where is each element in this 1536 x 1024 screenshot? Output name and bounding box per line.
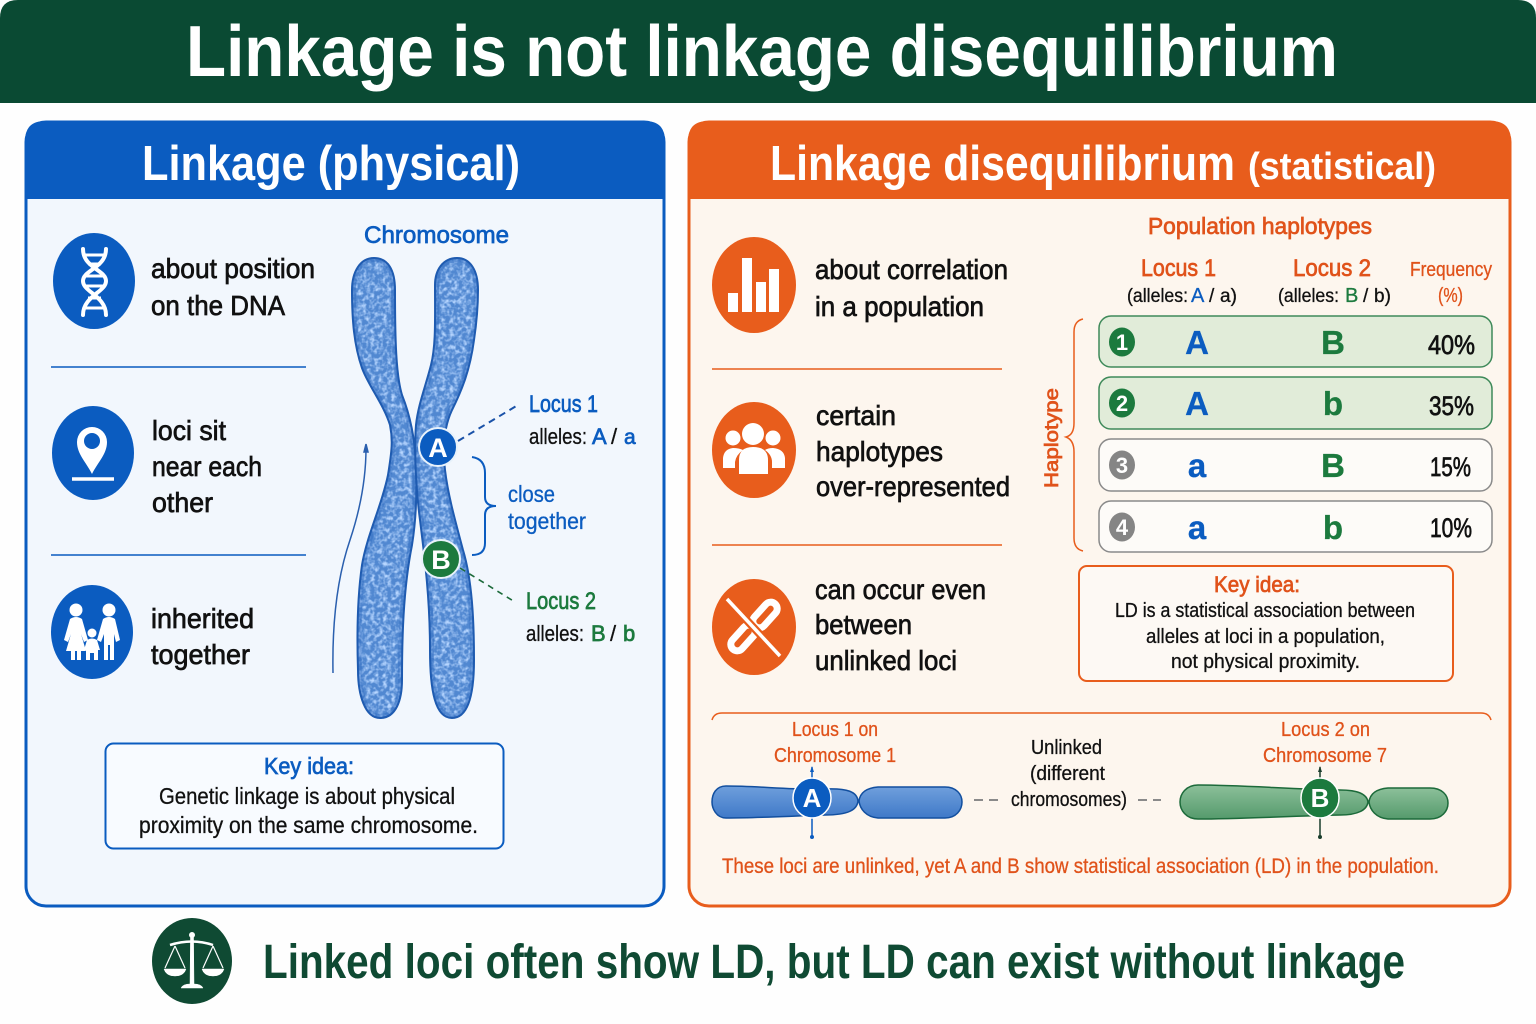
brace: close together: close (508, 481, 555, 507)
table row 2: 2 (1116, 391, 1128, 416)
table row 1 (1099, 316, 1492, 367)
table row 2: 35% (1429, 391, 1474, 421)
table row 1: 40% (1428, 330, 1475, 360)
table row 4: 4 (1116, 515, 1129, 540)
table row 4: b (1323, 509, 1343, 546)
panel header: linkage disequilibrium: (statistical) (1248, 146, 1436, 188)
table row 1: 1 (1116, 330, 1128, 355)
table header: locus 1: a) (1220, 286, 1237, 307)
table header: frequency (1410, 259, 1492, 307)
text: about position: about position (151, 253, 315, 284)
heading: population haplotypes: Population haplotypes (1148, 213, 1372, 239)
callout: key idea LD (1079, 566, 1453, 681)
label: locus 1: Locus 1 (529, 391, 598, 418)
table row 2 (1099, 377, 1492, 429)
icon: bar chart (712, 237, 796, 333)
table row 1: B (1321, 324, 1345, 361)
callout: key idea linkage: Genetic linkage is about physical (159, 783, 455, 809)
table header: locus 2: Locus 2 (1293, 255, 1371, 282)
icon: broken chain link (712, 579, 796, 675)
table header: locus 1: / (1209, 286, 1215, 307)
marker: locus A: A (428, 433, 448, 463)
text: loci sit near each other: loci sit (152, 415, 226, 446)
heading: chromosome: Chromosome (364, 222, 509, 249)
table row 2: b (1323, 385, 1343, 422)
table header: frequency: (%) (1438, 285, 1463, 307)
text: can occur even between unlinked loci: can occur even (815, 574, 986, 605)
callout: key idea LD: not physical proximity. (1171, 651, 1360, 673)
label: locus 1 on chromosome 1 (774, 719, 896, 767)
label: locus 1 on chromosome 1: Locus 1 on (792, 719, 878, 741)
icon: balance scale (152, 918, 232, 1004)
marker: locus B: B (431, 545, 451, 575)
label: locus 2 on chromosome 7: Chromosome 7 (1263, 745, 1387, 767)
text: certain haplotypes over-represented (816, 400, 1010, 502)
blue chromosome with locus A (712, 766, 962, 839)
label: unlinked: Unlinked (1031, 737, 1102, 759)
panel: linkage (physical) (25, 121, 665, 906)
arrow: curved along chromosome (333, 444, 368, 673)
table row 3 (1099, 439, 1492, 491)
label: locus 2 on chromosome 7 (1263, 719, 1387, 767)
panel header: linkage disequilibrium (688, 121, 1511, 199)
label: locus 2 on chromosome 7: Locus 2 on (1281, 719, 1370, 741)
green chromosome with locus B: B (1311, 783, 1329, 813)
panel header: linkage: Linkage (physical) (142, 137, 520, 191)
label: unlinked: chromosomes) (1011, 789, 1127, 811)
text: loci sit near each other: near each (152, 451, 262, 482)
callout: key idea LD: Key idea: (1214, 572, 1300, 597)
green chromosome with locus B (1180, 766, 1448, 839)
panel: linkage disequilibrium (statistical) (688, 121, 1511, 906)
note: unlinked yet associated: These loci are unlinked, yet A and B show statistical association (LD) in the population. (722, 855, 1439, 878)
label: unlinked (974, 737, 1161, 811)
text: can occur even between unlinked loci (815, 574, 986, 676)
callout: key idea linkage (106, 744, 504, 848)
panel header: linkage disequilibrium: Linkage disequilibrium (770, 137, 1235, 191)
table row 3: B (1321, 447, 1345, 484)
table row 1: A (1185, 324, 1209, 361)
text: about correlation: in a population (815, 291, 984, 322)
text: about position: on the DNA (151, 290, 285, 321)
text: certain haplotypes over-represented: certain (816, 400, 896, 431)
table header: locus 2 (1278, 255, 1391, 307)
panel header: linkage (25, 121, 665, 199)
table header: frequency: Frequency (1410, 259, 1492, 281)
marker: locus B (422, 540, 515, 602)
chromosome drawing (352, 258, 478, 718)
label: locus 2: B (591, 621, 606, 646)
callout: key idea LD: alleles at loci in a population, (1146, 626, 1385, 648)
table row 4: 10% (1430, 513, 1472, 543)
text: can occur even between unlinked loci: unlinked loci (815, 645, 957, 676)
table header: locus 2: (alleles: (1278, 286, 1339, 307)
label: locus 1 on chromosome 1: Chromosome 1 (774, 745, 896, 767)
title banner: Linkage is not linkage disequilibrium (186, 12, 1338, 92)
icon: family (51, 585, 133, 679)
label: locus 2: Locus 2 (526, 588, 596, 615)
brace: haplotype: Haplotype (1042, 388, 1063, 488)
brace: haplotype (1042, 319, 1083, 551)
table row 3: 15% (1430, 452, 1471, 482)
label: locus 1 (529, 391, 636, 449)
table header: locus 1: (alleles: (1127, 286, 1188, 307)
title banner (0, 0, 1536, 103)
text: inherited together (151, 603, 254, 670)
table header: locus 2: b) (1374, 286, 1391, 307)
blue chromosome with locus A: A (803, 783, 822, 813)
table header: locus 1: A (1191, 285, 1205, 307)
label: locus 2: alleles: (526, 621, 584, 646)
table row 4 (1099, 501, 1492, 552)
label: locus 1: A (592, 424, 607, 449)
label: locus 1: a (624, 426, 636, 449)
label: locus 2: / (610, 621, 617, 646)
table header: locus 2: B (1345, 285, 1358, 307)
table header: locus 1: Locus 1 (1141, 255, 1216, 282)
text: loci sit near each other: other (152, 487, 213, 518)
table row 3: a (1188, 447, 1207, 484)
label: locus 2 (526, 588, 635, 646)
label: locus 2: b (623, 621, 635, 646)
table header: locus 2: / (1363, 286, 1369, 307)
text: inherited together: together (151, 639, 250, 670)
brace: close together: together (508, 508, 586, 534)
table row 3: 3 (1116, 453, 1128, 478)
table row 2: A (1185, 385, 1209, 422)
table row 4: a (1188, 509, 1207, 546)
label: unlinked: (different (1030, 763, 1105, 785)
label: locus 1: alleles: (529, 424, 587, 449)
table header: locus 1 (1127, 255, 1237, 307)
brace: close together (472, 457, 586, 555)
text: can occur even between unlinked loci: between (815, 609, 912, 640)
callout: key idea LD: LD is a statistical association between (1115, 600, 1415, 622)
icon: DNA helix (53, 233, 135, 329)
icon: location pin (52, 406, 134, 500)
callout: key idea linkage: proximity on the same chromosome. (139, 812, 478, 838)
text: about position (151, 253, 315, 321)
text: inherited together: inherited (151, 603, 254, 634)
text: certain haplotypes over-represented: over-represented (816, 471, 1010, 502)
text: about correlation (815, 254, 1008, 322)
unlinked loci diagram (712, 713, 1491, 878)
text: loci sit near each other (152, 415, 262, 518)
callout: key idea linkage: Key idea: (264, 753, 354, 779)
icon: people group (712, 402, 796, 498)
label: locus 1: / (611, 424, 618, 449)
text: about correlation: about correlation (815, 254, 1008, 285)
marker: locus A (419, 405, 518, 466)
text: certain haplotypes over-represented: haplotypes (816, 436, 943, 467)
